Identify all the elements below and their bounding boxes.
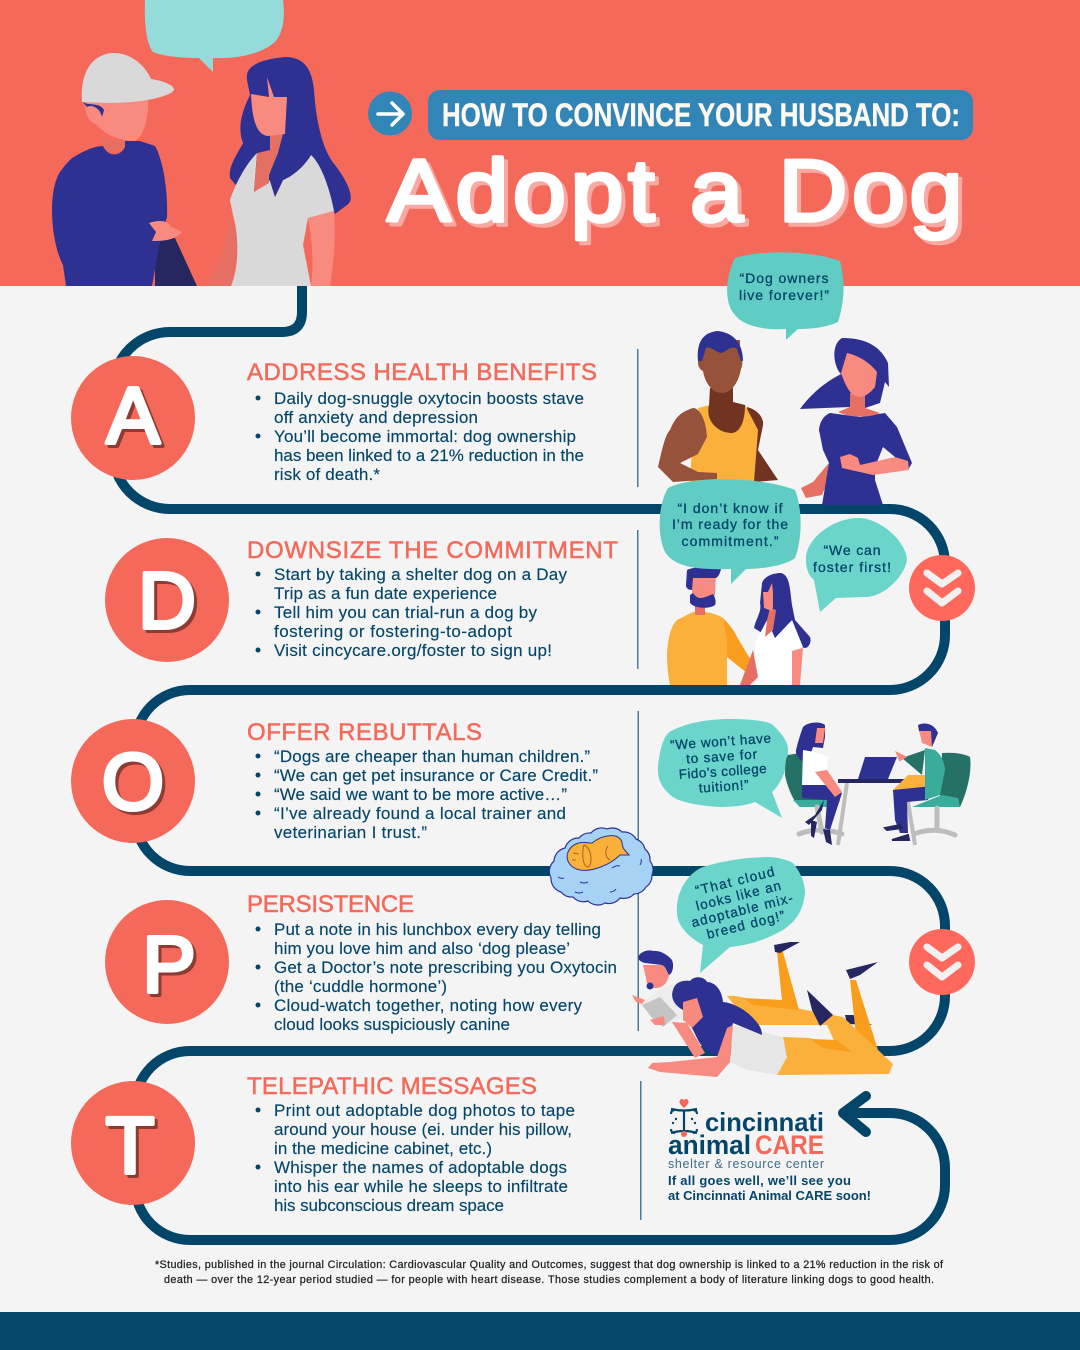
left chair — [785, 753, 842, 834]
bullet list A: off anxiety and depression — [274, 408, 478, 427]
speech bubble: not ready: I’m ready for the — [672, 516, 788, 532]
bullet list P: Put a note in his lunchbox every day telling — [274, 920, 601, 939]
logo: Cincinnati Animal CARE: shelter & resource center — [668, 1157, 824, 1171]
header band — [0, 0, 1080, 286]
bullet list D: Tell him you can trial-run a dog by — [274, 603, 538, 622]
illustration: couple A — [658, 331, 912, 505]
speech bubble: not ready: commitment.” — [682, 533, 779, 549]
illustration: couple lying down — [632, 942, 893, 1077]
speech bubble: dog owners live forever: “Dog owners — [740, 270, 828, 286]
logo wordmark: cincinnati — [705, 1107, 824, 1137]
bullet list P: Get a Doctor’s note prescribing you Oxytocin — [274, 958, 617, 977]
right chair — [912, 753, 971, 835]
divider A — [637, 349, 638, 487]
speech bubble: college tuition — [658, 719, 788, 818]
bullet list T: in the medicine cabinet, etc.) — [274, 1139, 492, 1158]
bullet list D: Visit cincycare.org/foster to sign up! — [274, 641, 552, 660]
winding path with arrow — [113, 286, 945, 1240]
speech bubble: header — [145, 0, 284, 72]
bullet list P: cloud looks suspiciously canine — [274, 1015, 510, 1034]
speech bubble: that cloud: looks like an — [694, 878, 782, 913]
bullet list O: veterinarian I trust.” — [274, 823, 427, 842]
woman with ponytail — [800, 338, 912, 505]
seated woman — [796, 723, 842, 845]
bullet list P — [256, 920, 617, 1034]
speech bubble: college tuition: “We won’t have — [670, 731, 771, 753]
panel: offer rebuttals — [71, 719, 598, 843]
heading T: TELEPATHIC MESSAGES — [247, 1073, 537, 1100]
man in tank top — [658, 331, 778, 482]
logo icon — [671, 1099, 697, 1137]
bullet list D — [256, 565, 568, 660]
panel: address health benefits — [71, 356, 597, 484]
bullet list T: Whisper the names of adoptable dogs — [274, 1158, 567, 1177]
speech bubble: foster first — [806, 518, 907, 612]
panel: downsize the commitment — [105, 537, 618, 662]
bullet list O: “I’ve already found a local trainer and — [274, 804, 566, 823]
speech bubble: not ready — [660, 479, 801, 584]
title: Adopt a Dog — [387, 141, 967, 240]
bullet list O: “We said we want to be more active…” — [274, 785, 567, 804]
letter badge P: P — [142, 920, 196, 1009]
bullet list T: his subconscious dream space — [274, 1196, 504, 1215]
footnote: death — over the 12-year period studied — for people with heart disease. Those studies complement a body of literature linking dogs to good health. — [164, 1274, 934, 1286]
panel: persistence — [105, 891, 617, 1034]
bullet list D: Trip as a fun date experience — [274, 584, 497, 603]
man in cap — [52, 53, 197, 286]
logo: Cincinnati Animal CARE: at Cincinnati Animal CARE soon! — [668, 1188, 871, 1203]
footnote: *Studies, published in the journal Circulation: Cardiovascular Quality and Outcomes, suggest that dog ownership is linked to a 21% reduction in the risk of — [155, 1259, 944, 1271]
bullet list T: into his ear while he sleeps to infiltrate — [274, 1177, 568, 1196]
bullet list P: Cloud-watch together, noting how every — [274, 996, 582, 1015]
heading O: OFFER REBUTTALS — [247, 719, 482, 746]
footnote — [155, 1259, 944, 1286]
chevron badge lower — [909, 929, 975, 995]
bullet list T: Print out adoptable dog photos to tape — [274, 1101, 575, 1120]
speech bubble: dog owners live forever: live forever!” — [739, 287, 829, 303]
letter badge A — [71, 356, 195, 480]
divider T — [640, 1081, 642, 1220]
divider O and P — [638, 711, 639, 1031]
letter badge D — [105, 538, 229, 662]
chevron badge upper — [909, 555, 975, 621]
heading A: ADDRESS HEALTH BENEFITS — [247, 359, 597, 386]
bullet list A: risk of death.* — [274, 465, 380, 484]
letter badge O: O — [102, 737, 164, 826]
letter badge T: T — [106, 1101, 154, 1190]
lying woman — [648, 962, 893, 1077]
woman in white — [740, 573, 811, 685]
heading D: DOWNSIZE THE COMMITMENT — [247, 537, 618, 564]
letter badge O — [71, 719, 195, 843]
bullet list A — [256, 389, 584, 484]
closing note: If all goes well, we’ll see you — [668, 1173, 851, 1188]
bullet list P: (the ‘cuddle hormone’) — [274, 977, 447, 996]
divider D — [637, 530, 638, 669]
letter badge P — [105, 900, 229, 1024]
bullet list D: fostering or fostering-to-adopt — [274, 622, 512, 641]
bullet list A: Daily dog-snuggle oxytocin boosts stave — [274, 389, 584, 408]
heading P: PERSISTENCE — [247, 891, 414, 918]
bullet list T: around your house (ei. under his pillow, — [274, 1120, 572, 1139]
title arrow icon — [368, 92, 412, 136]
letter badge D: D — [138, 556, 196, 645]
speech bubble: that cloud: adoptable mix- — [690, 890, 794, 930]
speech bubble: foster first: “We can — [824, 542, 880, 558]
illustration: header couple — [52, 0, 351, 286]
bullet list A: has been linked to a 21% reduction in the — [274, 446, 584, 465]
speech bubble: that cloud: “That cloud — [694, 864, 776, 898]
bullet list A: You’ll become immortal: dog ownership — [274, 427, 576, 446]
bullet list O: “Dogs are cheaper than human children.” — [274, 747, 590, 766]
logo: Cincinnati Animal CARE — [668, 1099, 871, 1203]
logo: Cincinnati Animal CARE: CARE — [755, 1130, 824, 1160]
bullet list T — [256, 1101, 575, 1215]
speech bubble: that cloud: breed dog!” — [705, 908, 786, 942]
footer band — [0, 1312, 1080, 1350]
letter badge T — [71, 1081, 195, 1205]
speech bubble: not ready: “I don’t know if — [678, 500, 783, 516]
speech bubble: college tuition: tuition!” — [698, 777, 749, 796]
speech bubble: that cloud — [677, 857, 805, 973]
subtitle pill: HOW TO CONVINCE YOUR HUSBAND TO: — [442, 97, 960, 133]
bullet list O — [256, 747, 598, 842]
speech bubble: dog owners live forever — [727, 252, 844, 340]
bearded man — [667, 567, 752, 685]
seated man — [885, 724, 945, 840]
bullet list O: “We can get pet insurance or Care Credit.” — [274, 766, 598, 785]
table and laptops — [838, 757, 931, 845]
bullet list P: him you love him and also ‘dog please’ — [274, 939, 570, 958]
icon: cloud with sleeping dog — [549, 828, 653, 905]
illustration: couple D — [667, 567, 811, 685]
speech bubble: college tuition: to save for — [686, 747, 758, 766]
bullet list D: Start by taking a shelter dog on a Day — [274, 565, 568, 584]
subtitle pill — [428, 90, 973, 140]
speech bubble: foster first: foster first! — [813, 559, 891, 575]
lying man — [632, 942, 872, 1027]
speech bubble: college tuition: Fido’s college — [678, 761, 767, 782]
illustration: office meeting — [785, 723, 971, 845]
logo: Cincinnati Animal CARE: animal — [668, 1130, 751, 1160]
panel: telepathic messages — [71, 1073, 575, 1215]
letter badge A: A — [106, 371, 160, 460]
woman with long hair — [205, 57, 351, 286]
